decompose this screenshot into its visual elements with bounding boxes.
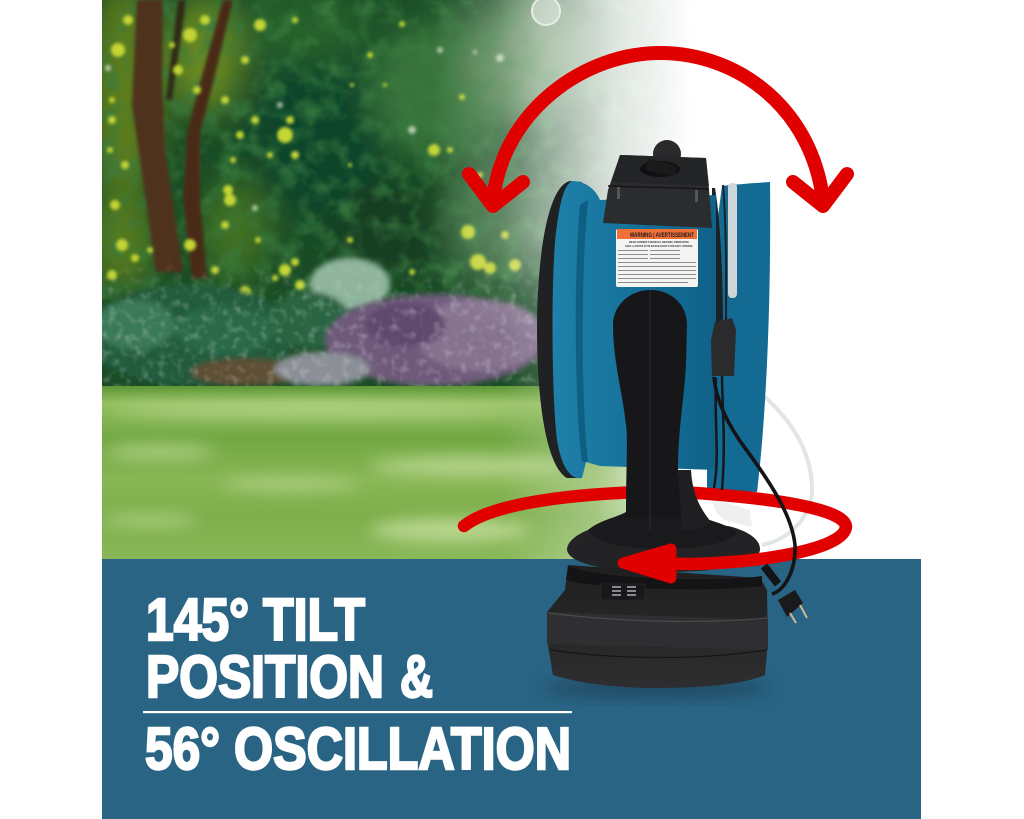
- pale leaf highlights: [105, 47, 504, 211]
- lawn light bands: [100, 404, 570, 542]
- lawn: [102, 386, 742, 559]
- power plug: [764, 566, 807, 623]
- tube along housing: [728, 183, 737, 298]
- base housing: [547, 565, 768, 688]
- bokeh highlights: [107, 15, 521, 298]
- garden photo background: [102, 0, 686, 559]
- warning label text: READ OWNER'S MANUAL BEFORE OPERATING: [629, 240, 690, 244]
- rear red arrow segments behind arm: [464, 492, 846, 527]
- drum flange shading: [576, 200, 588, 462]
- warning label heading: WARNING | AVERTISSEMENT: [630, 232, 694, 239]
- heading divider: [143, 711, 572, 713]
- soil patch: [190, 358, 300, 386]
- control buttons: [601, 584, 645, 600]
- control box: [603, 155, 712, 228]
- heading line 3: OSCILLATION: [234, 716, 571, 782]
- warning label: [616, 229, 698, 287]
- heading: tilt and oscillation: [143, 587, 572, 782]
- green shrubs: [85, 258, 390, 385]
- red tilt arrow: [469, 53, 847, 206]
- soap bubble: [532, 0, 560, 25]
- heading line 2: POSITION: [146, 644, 384, 710]
- infographic canvas: [102, 0, 921, 819]
- rear collar: [707, 182, 770, 492]
- tree trunks: [132, 0, 233, 278]
- drum body: [552, 181, 716, 478]
- rim ring: [711, 188, 723, 330]
- purple plants: [274, 294, 545, 386]
- power cord and plug: [711, 318, 807, 623]
- blue caption panel: [102, 559, 921, 819]
- cord strain relief: [711, 318, 736, 376]
- white fade over photo: [443, 0, 742, 559]
- rotary switch: [640, 161, 680, 177]
- leaf mottling: [102, 0, 571, 300]
- plant texture: [102, 255, 542, 387]
- knob on top: [653, 140, 681, 168]
- cable tag: [711, 498, 752, 527]
- product: oscillating misting fan: [464, 140, 846, 698]
- heading line 3: 56°: [145, 716, 220, 782]
- shadow under base: [540, 678, 770, 698]
- heading line 2: &: [400, 644, 433, 710]
- heading line 1: 145°: [146, 587, 249, 653]
- water tube behind fan: [762, 397, 812, 545]
- heading line 1: TILT: [263, 587, 365, 653]
- tilt arrowhead left: [469, 174, 523, 206]
- heading line 3: [145, 716, 571, 782]
- pivot arm and turntable: [567, 290, 760, 572]
- heading line 1: [146, 587, 365, 653]
- oscillation arrowhead: [623, 549, 671, 578]
- front black ring: [537, 181, 582, 478]
- tilt arrowhead right: [793, 174, 847, 206]
- warning label: LISEZ LA NOTICE D'UTILISATION AVANT D'UTILISER L'APPAREIL: [625, 244, 693, 248]
- red oscillation arrow front: [623, 526, 846, 578]
- foliage masses: [89, 0, 590, 290]
